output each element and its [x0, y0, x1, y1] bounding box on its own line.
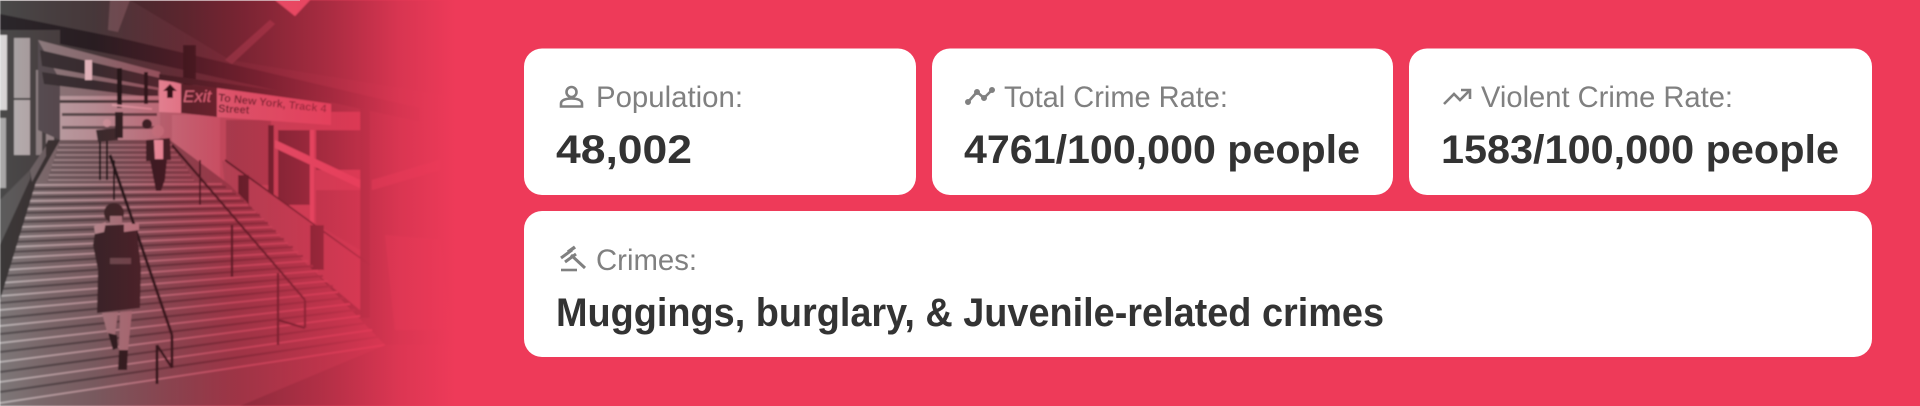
value: total crime rate: 4761/100,000 people [964, 128, 1360, 172]
label: total crime rate: Total Crime Rate: [1004, 81, 1228, 114]
background figures [96, 112, 123, 142]
icon: gavel [561, 247, 585, 270]
value: violent crime rate: 1583/100,000 people [1441, 128, 1839, 172]
windows right [160, 112, 370, 252]
value: crimes: Muggings, burglary, & Juvenile-related crimes [556, 291, 1384, 335]
sign [159, 74, 331, 125]
photo: station stairs with red fade [0, 0, 470, 406]
stair treads [0, 140, 385, 406]
man walking [142, 119, 171, 191]
icon: person [561, 87, 582, 106]
sign: To New York, Track 4 [218, 92, 328, 115]
woman foreground [93, 203, 141, 370]
back hall [38, 40, 160, 140]
left wall edge [0, 140, 60, 300]
card: population [524, 48, 916, 195]
sign: Exit [183, 87, 213, 106]
card: total crime rate [932, 48, 1393, 195]
sign: Street [218, 103, 250, 117]
label: violent crime rate: Violent Crime Rate: [1481, 81, 1733, 114]
label: population: Population: [596, 81, 743, 114]
icon: trending up arrow [1444, 90, 1470, 104]
label: crimes: Crimes: [596, 244, 697, 277]
card: violent crime rate [1409, 48, 1872, 195]
icon: line chart [966, 88, 994, 104]
rails [100, 140, 370, 384]
card: crimes [524, 211, 1872, 357]
value: population: 48,002 [556, 128, 692, 172]
